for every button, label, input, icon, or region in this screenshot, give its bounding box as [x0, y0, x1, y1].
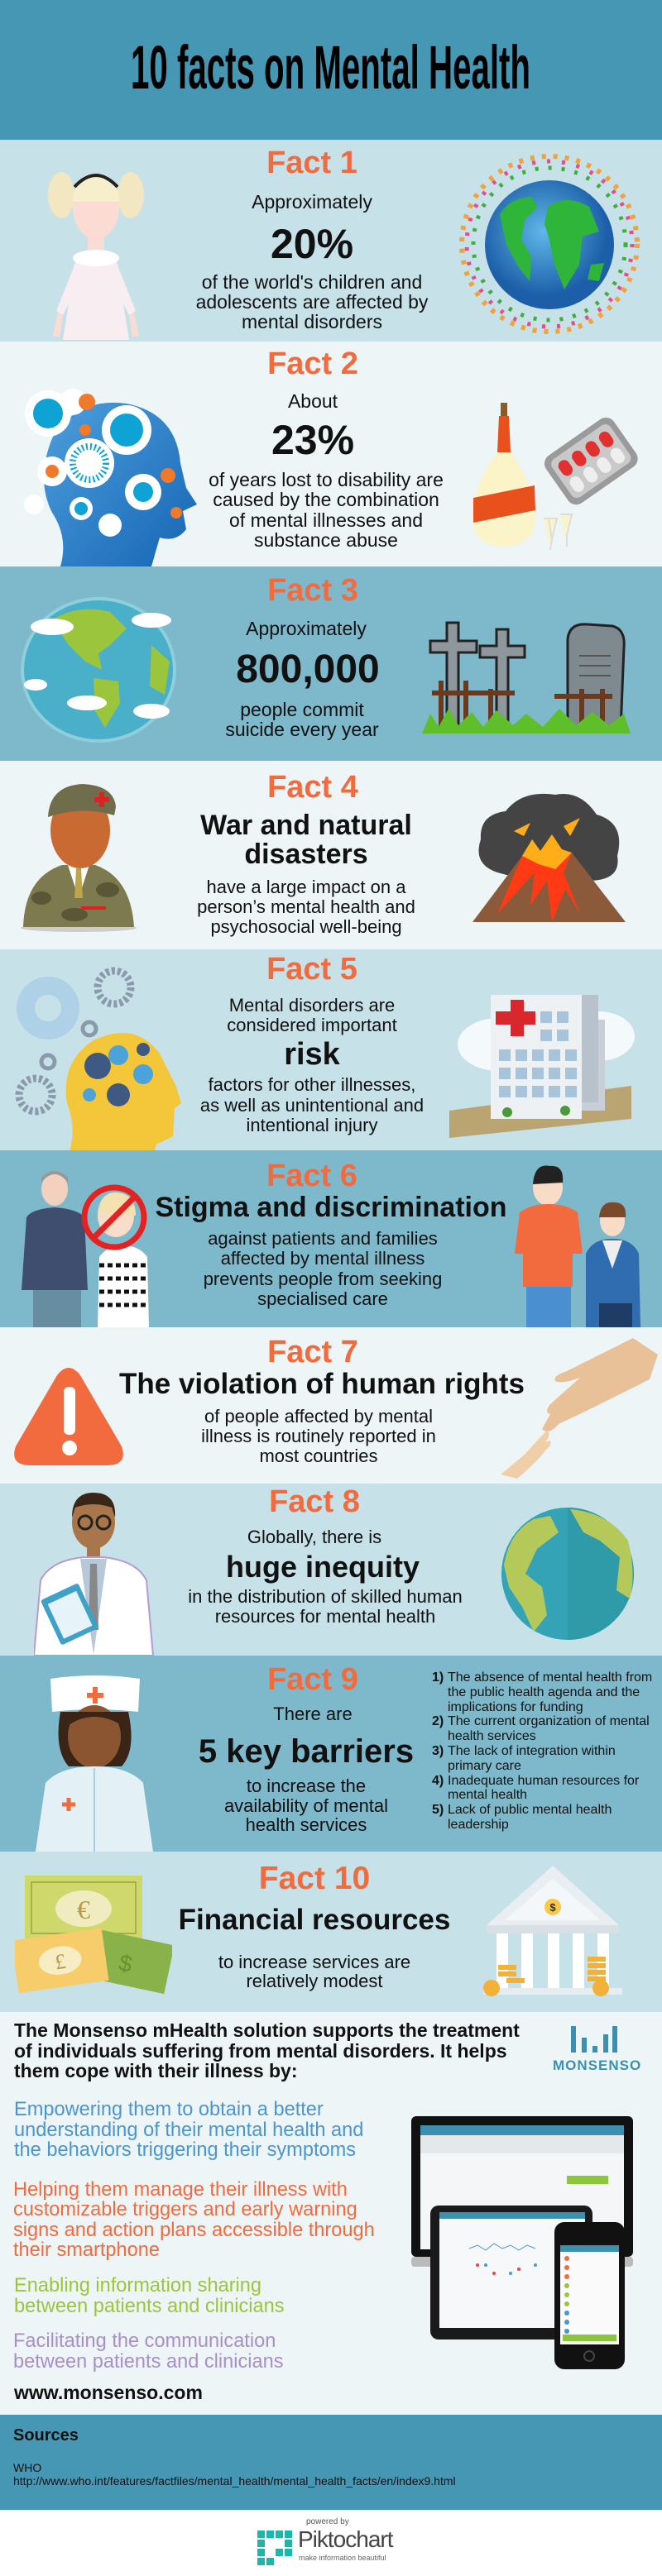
fact 10 description — [149, 1952, 480, 1991]
barriers list — [432, 1670, 652, 1832]
fact 8 label: Fact 8 — [269, 1484, 360, 1519]
fact 8 description: in the distribution of skilled human — [188, 1586, 463, 1607]
fact 9 description: availability of mental — [224, 1795, 388, 1816]
barriers list: 5) — [432, 1803, 444, 1817]
icon: hospital — [449, 995, 635, 1138]
fact 6 description — [204, 1228, 442, 1309]
icon: couple — [515, 1166, 640, 1327]
fact 6 description: prevents people from seeking — [204, 1269, 442, 1289]
sources text — [13, 2462, 456, 2488]
icon: head with gears — [15, 968, 181, 1150]
fact 5 label: Fact 5 — [266, 952, 357, 987]
icon: doctor — [34, 1493, 154, 1656]
benefit: communication: between patients and clinicians — [13, 2350, 284, 2372]
sources heading: Sources — [13, 2426, 79, 2445]
fact 6 headline: Stigma and discrimination — [155, 1192, 507, 1223]
icon: stigmatised people — [22, 1171, 149, 1327]
icon: reaching hands — [501, 1338, 658, 1479]
fact 4 headline — [200, 810, 412, 870]
fact 8 panel — [34, 1484, 634, 1656]
devices illustration — [411, 2116, 635, 2369]
fact 6 description: affected by mental illness — [221, 1248, 425, 1269]
monsenso logo: MONSENSO — [553, 2057, 641, 2073]
fact 7 panel — [14, 1335, 658, 1479]
benefit: information sharing: Enabling information sharing — [14, 2275, 261, 2296]
fact 2 label: Fact 2 — [267, 346, 358, 381]
sources text: http://www.who.int/features/factfiles/mental_health/mental_health_facts/en/index9.html — [13, 2474, 456, 2488]
fact 6 description: against patients and families — [208, 1228, 438, 1249]
fact 6 description: specialised care — [257, 1288, 388, 1309]
fact 8 description — [188, 1586, 463, 1627]
fact 7 description — [201, 1406, 436, 1466]
fact 5 panel — [15, 952, 635, 1150]
fact 1 stat: 20% — [271, 221, 353, 267]
fact 7 description: illness is routinely reported in — [201, 1426, 436, 1446]
footer: piktochart — [248, 2514, 414, 2572]
icon: earth — [21, 597, 176, 743]
fact 6 panel — [22, 1159, 640, 1327]
monsenso logo — [553, 2026, 636, 2077]
fact 1 text: Approximately — [252, 191, 372, 213]
icon: soldier — [21, 784, 137, 932]
icon: graves — [422, 622, 631, 734]
monsenso heading: The Monsenso mHealth solution supports the treatment — [14, 2019, 520, 2041]
fact 10 headline: Financial resources — [179, 1904, 450, 1936]
icon: banknotes: € — [77, 1895, 90, 1924]
fact 2 description: caused by the combination — [213, 489, 439, 510]
icon: banknotes: $ — [117, 1949, 135, 1977]
benefit: communication: Facilitating the communication — [13, 2330, 276, 2352]
fact 9 description: health services — [246, 1814, 367, 1835]
fact 8 headline: huge inequity — [226, 1550, 420, 1584]
fact 7 label: Fact 7 — [267, 1335, 358, 1369]
icon: bottle and pills — [473, 403, 638, 550]
fact 5 intro text: considered important — [227, 1015, 397, 1035]
benefit: empowering — [14, 2100, 363, 2160]
icon: nurse — [36, 1675, 153, 1852]
fact 4 panel — [21, 770, 626, 937]
fact 10 description: relatively modest — [246, 1971, 383, 1991]
fact 9 panel — [36, 1662, 652, 1852]
footer: piktochart: make information beautiful — [299, 2554, 386, 2562]
benefit: empowering: understanding of their mental health and — [14, 2119, 363, 2140]
barriers list: 4) — [432, 1774, 444, 1788]
monsenso heading: them cope with their illness by: — [14, 2060, 298, 2081]
benefit: information sharing: between patients and clinicians — [14, 2296, 285, 2317]
benefit: communication — [13, 2331, 284, 2372]
fact 8 intro text: Globally, there is — [247, 1527, 381, 1547]
fact 1 description: mental disorders — [242, 311, 382, 332]
benefit: managing illness: Helping them manage their illness with — [13, 2179, 348, 2201]
fact 7 description: most countries — [259, 1446, 378, 1466]
icon: banknotes: £ — [53, 1949, 67, 1974]
fact 8 description: resources for mental health — [215, 1606, 435, 1627]
website: www.monsenso.com — [14, 2382, 203, 2403]
fact 3 description: suicide every year — [225, 719, 379, 740]
footer: piktochart: Piktochart — [298, 2526, 392, 2552]
fact 5 keyword: risk — [284, 1037, 340, 1072]
benefit: empowering: the behaviors triggering their symptoms — [14, 2139, 356, 2161]
fact 7 description: of people affected by mental — [204, 1406, 433, 1427]
fact 9 description — [224, 1775, 388, 1835]
benefit: managing illness: customizable triggers and early warning — [13, 2199, 357, 2220]
barriers list: 1) — [432, 1670, 444, 1685]
icon: warning triangle — [14, 1368, 123, 1465]
fact 2 description: of years lost to disability are — [209, 469, 444, 490]
fact 2 description: substance abuse — [254, 529, 398, 551]
icon: bank with coins — [482, 1866, 624, 1998]
fact 4 description — [197, 877, 415, 937]
footer: piktochart: powered by — [306, 2517, 349, 2526]
fact 5 description: as well as unintentional and — [200, 1095, 424, 1115]
fact 5 description — [200, 1074, 424, 1135]
barriers list: Inadequate human resources for mental health — [448, 1774, 639, 1802]
icon: girl — [48, 172, 144, 340]
fact 1 panel — [48, 146, 640, 340]
fact 2 description — [209, 469, 444, 551]
fact 5 description: intentional injury — [247, 1115, 377, 1135]
barriers list: The lack of integration within primary care — [448, 1744, 616, 1773]
fact 1 description: adolescents are affected by — [196, 291, 428, 313]
barriers list: 3) — [432, 1744, 444, 1758]
fact 1 description: of the world's children and — [202, 271, 422, 293]
fact 1 label: Fact 1 — [266, 146, 357, 180]
barriers list: The current organization of mental health services — [448, 1714, 650, 1743]
sources text: WHO — [13, 2461, 41, 2474]
fact 4 headline: disasters — [244, 839, 368, 870]
icon: banknotes — [15, 1876, 172, 2000]
fact 3 label: Fact 3 — [267, 573, 358, 608]
icon: globe with children — [459, 154, 640, 334]
fact 9 label: Fact 9 — [267, 1662, 358, 1697]
monsenso heading: of individuals suffering from mental disorders. It helps — [14, 2039, 507, 2061]
fact 9 intro text: There are — [273, 1704, 353, 1724]
fact 3 text: Approximately — [246, 618, 367, 639]
benefit: managing illness: signs and action plans accessible through — [13, 2220, 375, 2241]
fact 6 label: Fact 6 — [266, 1159, 357, 1193]
fact 9 description: to increase the — [247, 1775, 366, 1796]
fact 5 description: factors for other illnesses, — [209, 1074, 415, 1095]
fact 2 panel — [24, 346, 638, 566]
fact 2 stat: 23% — [271, 417, 354, 463]
icon: globe — [501, 1508, 634, 1640]
benefit: empowering: Empowering them to obtain a better — [14, 2099, 324, 2120]
fact 2 text: About — [288, 390, 338, 412]
fact 1 description — [196, 271, 429, 332]
barriers list: 2) — [432, 1714, 444, 1728]
fact 5 intro text — [227, 995, 397, 1035]
fact 10 panel — [15, 1861, 622, 1996]
fact 10 label: Fact 10 — [259, 1861, 370, 1896]
sources panel — [0, 2415, 662, 2510]
barriers list: Lack of public mental health leadership — [448, 1803, 612, 1832]
icon: volcano — [473, 794, 626, 922]
fact 4 label: Fact 4 — [267, 770, 358, 805]
fact 3 stat: 800,000 — [236, 648, 380, 691]
icon: head with gears — [24, 389, 197, 566]
icon: piktochart logo — [257, 2531, 292, 2567]
fact 2 description: of mental illnesses and — [229, 509, 423, 531]
fact 5 intro text: Mental disorders are — [229, 995, 395, 1016]
fact 9 headline: 5 key barriers — [199, 1733, 414, 1770]
fact 4 description: person’s mental health and — [197, 896, 415, 917]
fact 4 description: psychosocial well-being — [210, 916, 402, 937]
fact 3 panel — [21, 573, 631, 743]
benefit: information sharing — [14, 2276, 285, 2316]
benefit: managing illness: their smartphone — [13, 2239, 160, 2261]
barriers list: The absence of mental health from the public health agenda and the implications for funding — [448, 1670, 652, 1714]
fact 7 headline: The violation of human rights — [119, 1368, 525, 1400]
fact 4 headline: War and natural — [200, 810, 412, 841]
monsenso panel — [0, 2012, 662, 2415]
icon: bank with coins: $ — [549, 1901, 556, 1914]
fact 4 description: have a large impact on a — [207, 877, 405, 897]
fact 10 description: to increase services are — [218, 1952, 410, 1972]
fact 3 description — [225, 699, 379, 740]
monsenso heading — [14, 2020, 552, 2081]
fact 3 description: people commit — [240, 699, 364, 720]
benefit: managing illness — [13, 2180, 375, 2260]
